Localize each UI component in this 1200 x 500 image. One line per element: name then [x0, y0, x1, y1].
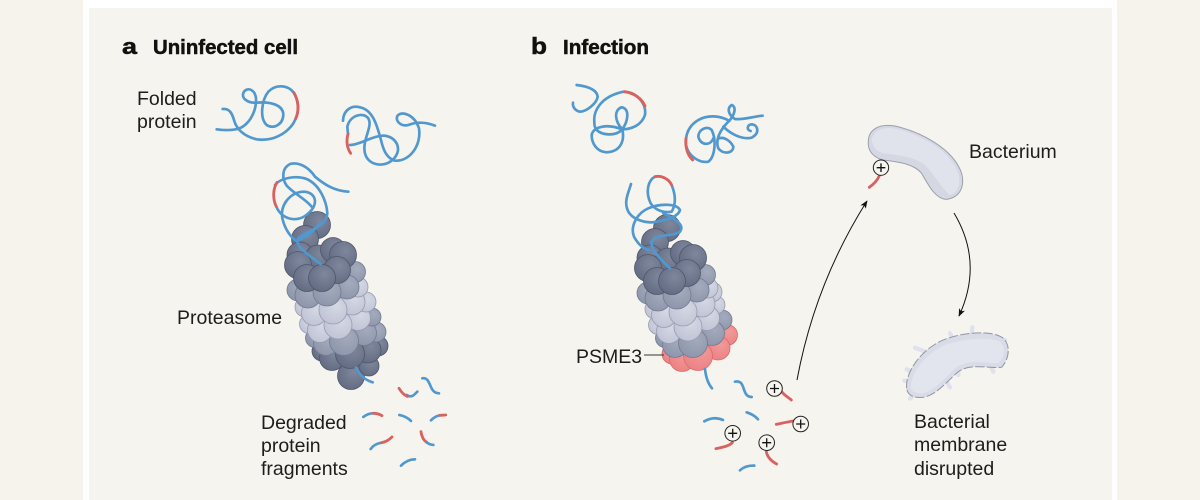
label: Bacterial membrane disrupted: disrupted: [914, 458, 994, 480]
heading: b Infection: b: [531, 33, 547, 59]
icon: bacterium: [868, 125, 963, 199]
label: Proteasome: Proteasome: [177, 307, 282, 329]
icon: exiting strand: [356, 368, 373, 382]
icon: positive charges: [725, 381, 808, 451]
icon: disrupted bacterium: [904, 327, 1008, 399]
label: Folded protein: [137, 88, 197, 133]
degraded protein fragments: [363, 378, 446, 466]
icon: folded protein 1: [217, 86, 298, 140]
icon: protein entering proteasome b: [626, 176, 681, 268]
arrow: bacterium to disrupted: [954, 213, 970, 316]
icon: folded protein 4: [686, 105, 763, 162]
label: Bacterial membrane disrupted: [914, 411, 1007, 480]
label: Degraded protein fragments: fragments: [261, 458, 348, 480]
label: Degraded protein fragments: protein: [261, 435, 321, 457]
label: Folded protein: protein: [137, 111, 197, 133]
label: Folded protein: Folded: [137, 88, 197, 110]
label: Bacterial membrane disrupted: Bacterial: [914, 411, 990, 433]
label: Bacterial membrane disrupted: membrane: [914, 434, 1007, 456]
arrow: fragments to bacterium: [797, 201, 867, 380]
proteasome: [284, 212, 388, 390]
heading: b Infection: Infection: [563, 37, 649, 59]
label: PSME3 with leader: PSME3: [576, 346, 642, 368]
icon: folded protein 3: [573, 85, 645, 152]
charged fragments: [704, 369, 793, 470]
panel: a uninfected cell: [122, 34, 446, 480]
proteasome with PSME3: [634, 214, 738, 372]
label: Degraded protein fragments: Degraded: [261, 412, 347, 434]
icon: folded protein 2: [343, 107, 435, 165]
heading: a Uninfected cell: a: [122, 34, 138, 59]
heading: b Infection: [531, 33, 649, 59]
icon: protein entering proteasome: [274, 163, 348, 264]
heading: a Uninfected cell: Uninfected cell: [153, 37, 298, 59]
label: Degraded protein fragments: [261, 412, 348, 480]
panel: b infection: [531, 33, 1057, 480]
label: Bacterium: Bacterium: [969, 141, 1057, 163]
